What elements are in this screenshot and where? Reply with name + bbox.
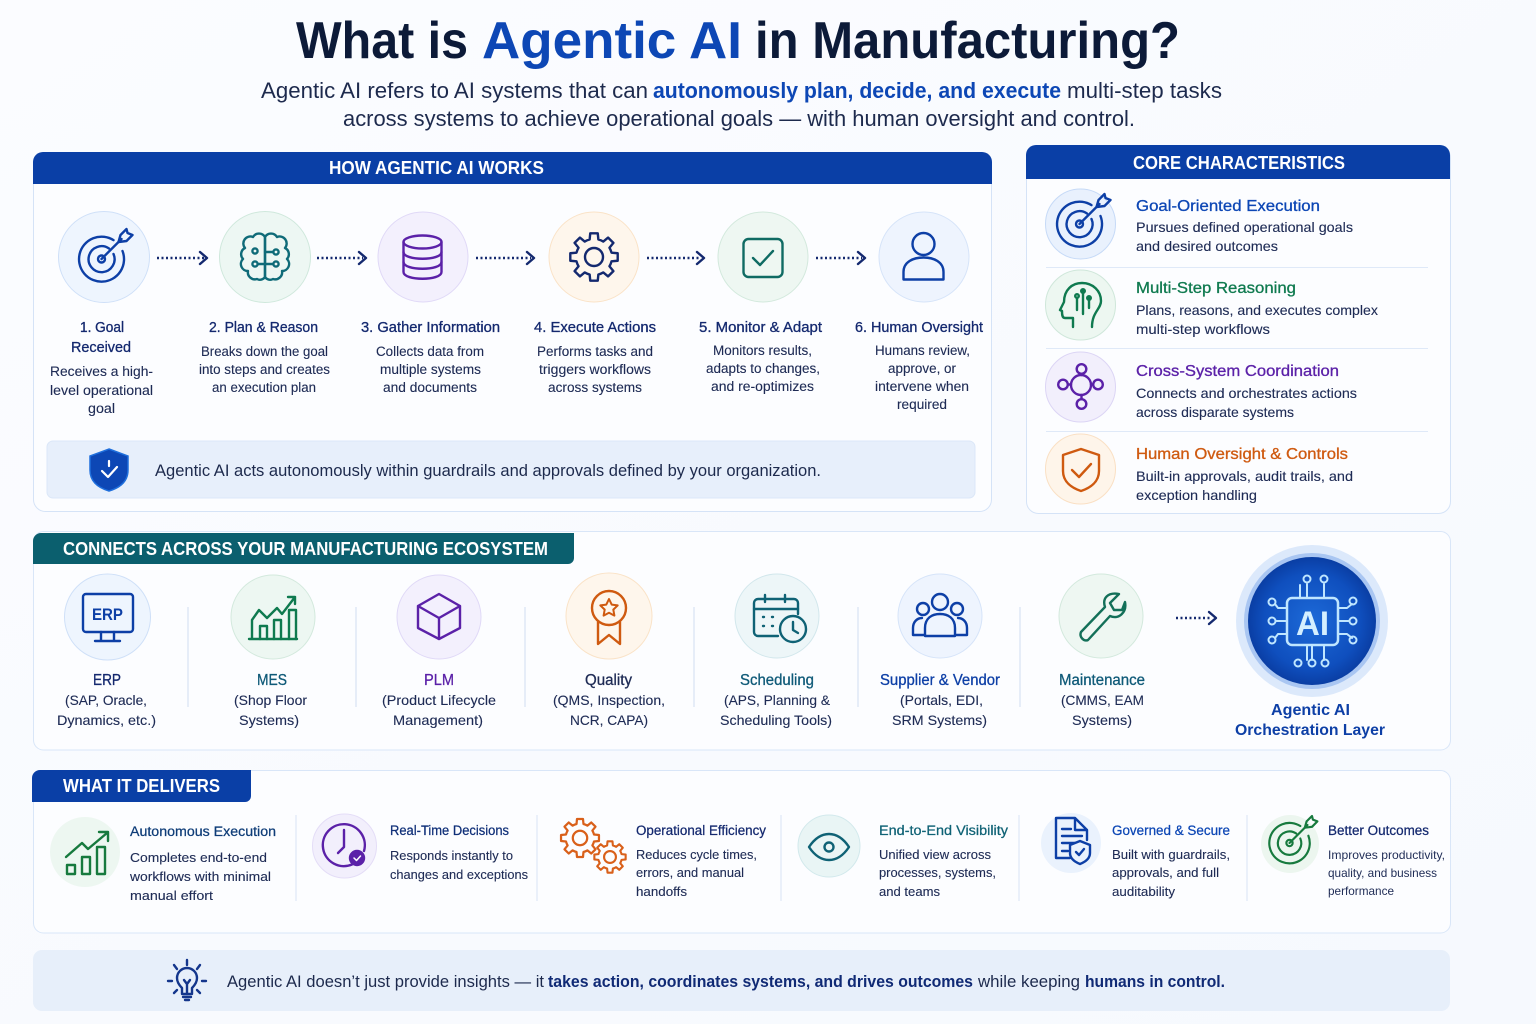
real-time decisions: Real-Time Decisions xyxy=(390,823,509,838)
end-to-end visibility: and teams xyxy=(879,884,941,899)
subtitle: across systems to achieve operational goals — with human oversight and control. xyxy=(343,106,1135,131)
arrow xyxy=(1176,612,1216,624)
step 3 text: and documents xyxy=(383,380,477,395)
step 4 text: Performs tasks and xyxy=(537,344,653,359)
icon: step 2 brain xyxy=(220,212,310,302)
orchestration label xyxy=(1235,702,1385,739)
operational efficiency xyxy=(561,819,766,899)
step 2 text: Breaks down the goal xyxy=(201,344,328,359)
Supplier and vendor system: (Portals, EDI, xyxy=(900,692,983,708)
arrow xyxy=(317,252,366,264)
panel: how agentic AI works xyxy=(33,152,992,512)
better outcomes: quality, and business xyxy=(1328,866,1437,880)
PLM system: PLM xyxy=(424,672,454,689)
step 6 text: approve, or xyxy=(888,361,956,376)
icon: step 6 person xyxy=(879,212,969,302)
goal-oriented execution: and desired outcomes xyxy=(1136,238,1278,254)
panel: what it delivers xyxy=(32,770,1450,933)
step 6 text: Humans review, xyxy=(875,343,970,358)
goal-oriented execution xyxy=(1136,198,1353,254)
Quality system: Quality xyxy=(585,672,632,689)
autonomous execution: workflows with minimal xyxy=(129,869,271,884)
cross-system coordination: Connects and orchestrates actions xyxy=(1136,385,1357,401)
Quality system: NCR, CAPA) xyxy=(570,712,648,728)
Quality system: (QMS, Inspection, xyxy=(553,692,665,708)
heading: core characteristics: CORE CHARACTERISTICS xyxy=(1133,153,1345,173)
step 1 text xyxy=(50,320,153,416)
takeaway text: humans in control. xyxy=(1085,972,1225,991)
cross-system coordination xyxy=(1136,363,1357,420)
title: What is xyxy=(296,12,468,70)
takeaway text: Agentic AI doesn’t just provide insights — it xyxy=(227,972,544,991)
arrow xyxy=(816,252,865,264)
multi-step reasoning: Multi-Step Reasoning xyxy=(1136,280,1296,297)
Maintenance system: (CMMS, EAM xyxy=(1061,692,1144,708)
Supplier and vendor system: Supplier & Vendor xyxy=(880,672,1000,689)
step 6 text: 6. Human Oversight xyxy=(855,320,983,336)
Maintenance system xyxy=(1059,574,1145,728)
step 4 text: across systems xyxy=(548,380,642,395)
step 5 text: adapts to changes, xyxy=(706,361,820,376)
heading: ecosystem xyxy=(33,533,574,564)
governed and secure: approvals, and full xyxy=(1112,865,1219,880)
arrow xyxy=(476,252,534,264)
panel: manufacturing ecosystem xyxy=(33,532,1450,750)
Supplier and vendor system: SRM Systems) xyxy=(892,712,987,728)
cross-system coordination: Cross-System Coordination xyxy=(1136,363,1339,380)
icon: shield xyxy=(90,449,128,491)
step 1 text: level operational xyxy=(50,383,153,398)
subtitle: Agentic AI refers to AI systems that can xyxy=(261,78,648,103)
step 4 text: 4. Execute Actions xyxy=(534,320,656,336)
governed and secure: auditability xyxy=(1112,884,1176,899)
step 2 text xyxy=(199,320,330,395)
orchestration label: Orchestration Layer xyxy=(1235,722,1385,739)
ERP system: ERP xyxy=(93,672,121,689)
arrow xyxy=(647,252,704,264)
ERP system: Dynamics, etc.) xyxy=(57,712,156,728)
PLM system: Management) xyxy=(393,712,483,728)
Scheduling system: Scheduling Tools) xyxy=(720,712,832,728)
orchestration label: Agentic AI xyxy=(1271,702,1350,719)
governed and secure: Governed & Secure xyxy=(1112,823,1230,838)
autonomous execution xyxy=(50,817,276,903)
MES system: (Shop Floor xyxy=(234,692,307,708)
autonomous execution: Completes end-to-end xyxy=(130,850,267,865)
takeaway text: while keeping xyxy=(977,972,1080,991)
icon: head with circuits xyxy=(1046,270,1116,340)
Quality system xyxy=(553,573,665,728)
better outcomes: performance xyxy=(1328,884,1394,898)
subtitle xyxy=(261,78,1222,131)
icon: AI chip: AI xyxy=(1296,605,1329,643)
panel: core characteristics xyxy=(1026,145,1450,514)
step 5 text: and re-optimizes xyxy=(711,379,814,394)
icon: step 4 gear xyxy=(549,212,639,302)
icon: network xyxy=(1046,352,1116,422)
ERP system: (SAP, Oracle, xyxy=(65,692,147,708)
operational efficiency: Reduces cycle times, xyxy=(636,847,757,862)
step 1 text: goal xyxy=(88,401,115,416)
human oversight and controls: exception handling xyxy=(1136,487,1257,503)
step 3 text: 3. Gather Information xyxy=(361,320,500,336)
heading: core characteristics xyxy=(1026,145,1450,179)
Scheduling system xyxy=(720,574,832,728)
step 1 text: Receives a high- xyxy=(50,364,153,379)
real-time decisions xyxy=(312,814,528,882)
end-to-end visibility: Unified view across xyxy=(879,847,991,862)
step 4 text xyxy=(534,320,656,395)
governed and secure xyxy=(1041,813,1230,899)
title: Agentic AI xyxy=(482,12,742,70)
end-to-end visibility: End-to-End Visibility xyxy=(879,823,1008,838)
step 6 text xyxy=(855,320,983,412)
subtitle: autonomously plan, decide, and execute xyxy=(653,78,1061,103)
PLM system xyxy=(382,575,496,728)
step 2 text: an execution plan xyxy=(212,380,316,395)
operational efficiency: Operational Efficiency xyxy=(636,823,766,838)
Maintenance system: Maintenance xyxy=(1059,672,1145,689)
icon: goal target xyxy=(1046,189,1116,259)
step 1 text: 1. Goal xyxy=(80,320,124,336)
autonomous execution: Autonomous Execution xyxy=(130,824,276,839)
icon: step 3 database xyxy=(378,212,468,302)
real-time decisions: changes and exceptions xyxy=(390,867,528,882)
icon: step 5 checklist xyxy=(718,212,808,302)
goal-oriented execution: Goal-Oriented Execution xyxy=(1136,198,1320,215)
icon: shield check xyxy=(1046,434,1116,504)
takeaway text: takes action, coordinates systems, and drives outcomes xyxy=(548,972,973,991)
better outcomes xyxy=(1261,815,1445,898)
operational efficiency: handoffs xyxy=(636,884,688,899)
MES system xyxy=(231,575,315,728)
heading: ecosystem: CONNECTS ACROSS YOUR MANUFACTURING ECOSYSTEM xyxy=(63,539,548,559)
human oversight and controls xyxy=(1136,446,1353,503)
multi-step reasoning: multi-step workflows xyxy=(1136,321,1270,337)
MES system: MES xyxy=(257,672,287,689)
step 6 text: intervene when xyxy=(875,379,969,394)
governed and secure: Built with guardrails, xyxy=(1112,847,1230,862)
PLM system: (Product Lifecycle xyxy=(382,692,496,708)
better outcomes: Better Outcomes xyxy=(1328,823,1429,838)
multi-step reasoning xyxy=(1136,280,1378,337)
title xyxy=(296,12,1180,70)
human oversight and controls: Built-in approvals, audit trails, and xyxy=(1136,468,1353,484)
heading: what it delivers: WHAT IT DELIVERS xyxy=(63,776,220,796)
takeaway text xyxy=(227,972,1225,991)
goal-oriented execution: Pursues defined operational goals xyxy=(1136,219,1353,235)
title: in Manufacturing? xyxy=(755,12,1180,70)
ERP system: ERP xyxy=(92,605,123,624)
Supplier and vendor system xyxy=(880,574,1000,728)
Scheduling system: Scheduling xyxy=(740,672,814,689)
real-time decisions: Responds instantly to xyxy=(390,848,513,863)
operational efficiency: errors, and manual xyxy=(636,865,744,880)
step 2 text: into steps and creates xyxy=(199,362,330,377)
banner: takeaway xyxy=(33,950,1450,1011)
step 2 text: 2. Plan & Reason xyxy=(209,320,318,336)
step 3 text: Collects data from xyxy=(376,344,484,359)
icon: step 1 target xyxy=(58,212,150,302)
better outcomes: Improves productivity, xyxy=(1328,848,1445,862)
step 5 text: Monitors results, xyxy=(713,343,812,358)
Maintenance system: Systems) xyxy=(1072,712,1132,728)
subtitle: multi-step tasks xyxy=(1067,78,1222,103)
heading: how agentic AI works: HOW AGENTIC AI WORKS xyxy=(329,158,544,178)
MES system: Systems) xyxy=(239,712,299,728)
autonomous execution: manual effort xyxy=(130,888,213,903)
heading: what it delivers xyxy=(32,770,251,802)
step 1 text: Received xyxy=(71,340,131,356)
end-to-end visibility: processes, systems, xyxy=(879,865,996,880)
end-to-end visibility xyxy=(798,815,1008,899)
step 4 text: triggers workflows xyxy=(539,362,651,377)
icon: light bulb xyxy=(168,960,206,1000)
step 3 text: multiple systems xyxy=(380,362,481,377)
callout: guardrails: Agentic AI acts autonomously within guardrails and approvals defined by your organization. xyxy=(155,461,821,480)
arrow xyxy=(157,252,207,264)
human oversight and controls: Human Oversight & Controls xyxy=(1136,446,1348,463)
multi-step reasoning: Plans, reasons, and executes complex xyxy=(1136,302,1378,318)
step 5 text: 5. Monitor & Adapt xyxy=(699,320,822,336)
step 3 text xyxy=(361,320,500,395)
step 5 text xyxy=(699,320,822,394)
step 6 text: required xyxy=(897,397,947,412)
ERP system xyxy=(57,574,156,728)
heading: how agentic AI works xyxy=(33,152,992,184)
callout: guardrails xyxy=(47,441,975,498)
Scheduling system: (APS, Planning & xyxy=(724,692,831,708)
cross-system coordination: across disparate systems xyxy=(1136,404,1294,420)
icon: AI chip xyxy=(1236,545,1388,697)
